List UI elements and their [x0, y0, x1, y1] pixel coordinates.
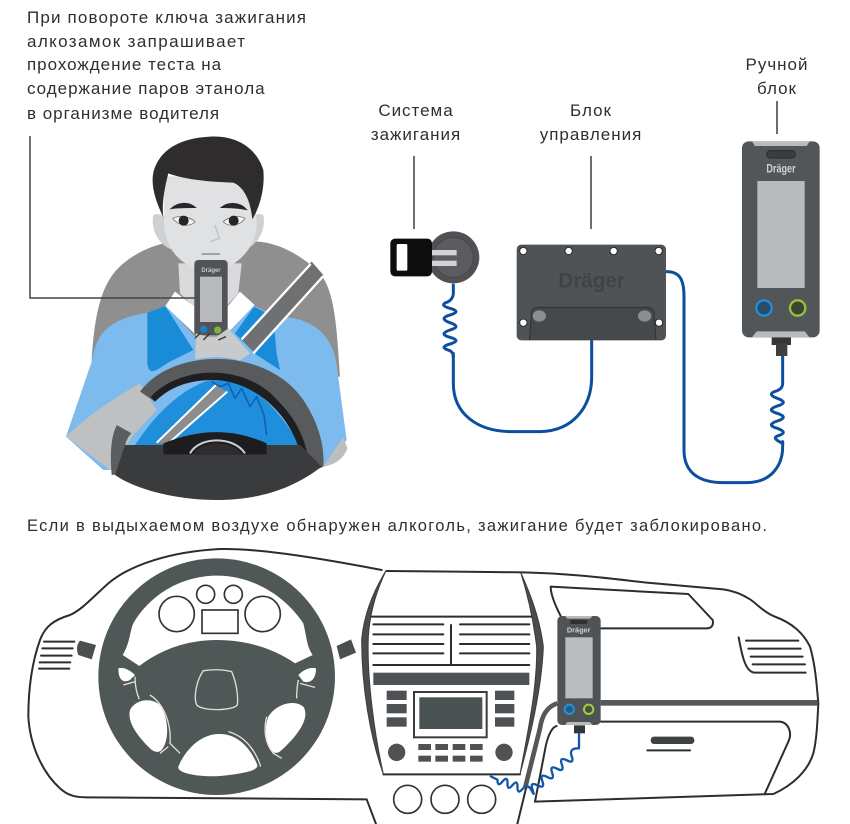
cable behind wheel [212, 382, 267, 435]
gauges [159, 585, 280, 633]
holding hand [195, 328, 250, 361]
device diagram [390, 141, 820, 483]
intro text block: алкозамок запрашивает [27, 32, 245, 51]
handset in mouth [194, 260, 228, 335]
nose and mouth [210, 225, 219, 242]
handset unit [742, 141, 820, 356]
center console left [362, 571, 386, 774]
seat belt [157, 262, 323, 443]
intro text block: При повороте ключа зажигания [27, 8, 306, 27]
eyebrows [172, 204, 246, 209]
upper glove panel [551, 587, 713, 628]
handset on dash: Dräger [567, 625, 591, 634]
label: ignition system [371, 101, 461, 144]
intro text block [27, 8, 306, 123]
hub seams [123, 670, 315, 767]
glove box [535, 722, 790, 802]
cable coil [490, 733, 579, 794]
face [164, 176, 257, 268]
radio display [414, 692, 487, 737]
handset unit: Dräger [766, 162, 796, 176]
cables [444, 272, 783, 483]
collar [165, 292, 255, 333]
label: control unit [540, 101, 642, 144]
eyes [173, 216, 245, 225]
dashboard outline left [28, 549, 382, 824]
steering wheel [111, 359, 324, 500]
label: handset [746, 55, 808, 98]
shirt shadow areas [147, 306, 193, 371]
steering wheel [98, 558, 335, 795]
radio buttons [387, 691, 514, 762]
left sleeve and arm [66, 383, 157, 470]
shirt [66, 305, 347, 470]
neck [178, 263, 242, 323]
climate knobs [394, 785, 496, 813]
shoulders [92, 242, 340, 387]
control unit box: Dräger [558, 268, 625, 292]
intro text block: прохождение теста на [27, 55, 222, 74]
handset in mouth: Dräger [201, 268, 221, 274]
wheel hub [115, 445, 322, 500]
dash strip [601, 700, 817, 706]
ears [153, 214, 264, 250]
dashboard illustration [28, 549, 818, 824]
label: control unit: Блок [570, 101, 612, 120]
right vent [739, 637, 806, 673]
hair [153, 137, 264, 219]
label: ignition system: Система [378, 101, 454, 120]
label: handset: блок [757, 79, 797, 98]
console vents [373, 624, 529, 665]
pointer lines [414, 101, 777, 229]
intro text block: в организме водителя [27, 104, 220, 123]
label: control unit: управления [540, 125, 642, 144]
label: handset: Ручной [746, 55, 808, 74]
console [372, 572, 543, 774]
intro text block: содержание паров этанола [27, 79, 266, 98]
leader line to driver's device [30, 136, 195, 298]
side strip [525, 703, 557, 788]
right forearm [323, 437, 347, 467]
dashboard: right half [372, 571, 818, 824]
dashboard: left half [28, 549, 386, 824]
label: ignition system: зажигания [371, 125, 461, 144]
control unit box [517, 245, 666, 340]
handset on dash [557, 616, 601, 733]
dashboard outline right [387, 571, 818, 802]
left vent [39, 642, 74, 669]
icon: ignition lock [390, 231, 479, 283]
stalks [77, 641, 96, 659]
illustration: driver blowing into handset [66, 137, 347, 500]
warning sentence: Если в выдыхаемом воздухе обнаружен алкоголь, зажигание будет заблокировано. [27, 517, 767, 535]
